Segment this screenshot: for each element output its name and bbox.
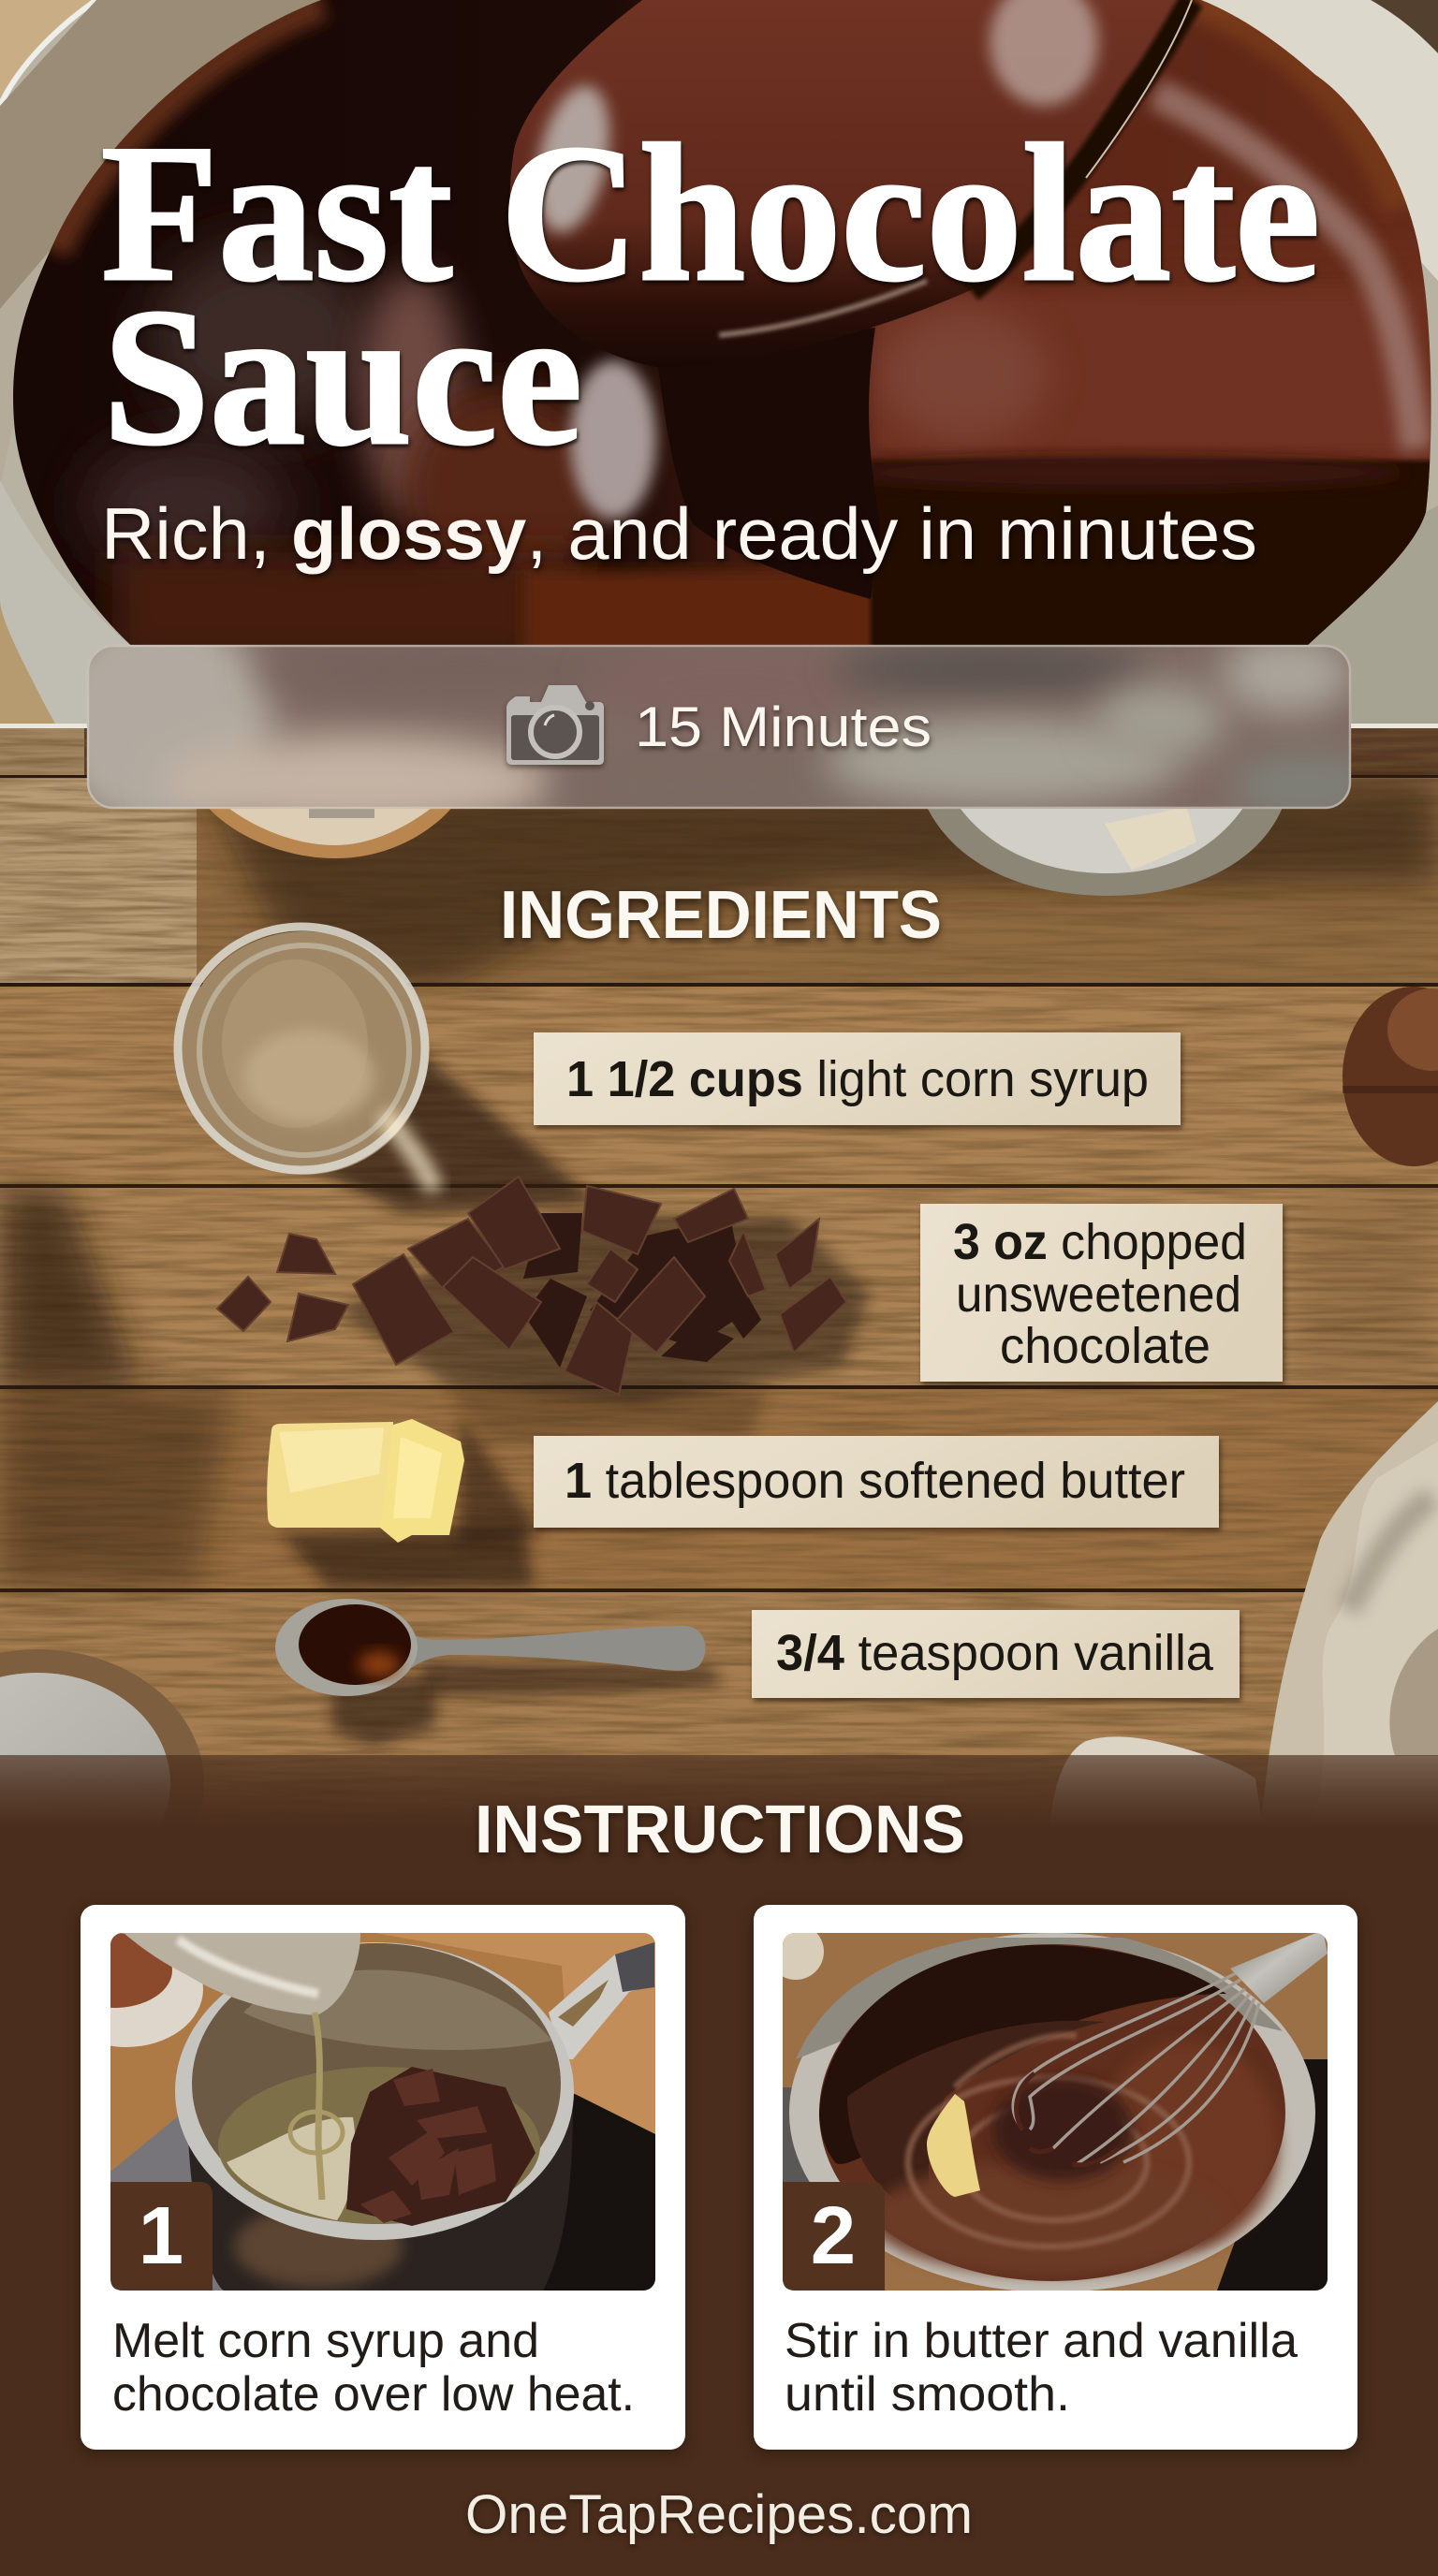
step 2 text: until smooth.	[785, 2367, 1070, 2422]
step 1 text: chocolate over low heat.	[112, 2367, 635, 2422]
ingredient label: corn syrup: 1 1/2 cups light corn syrup	[566, 1051, 1149, 1107]
ingredient label: chocolate	[920, 1204, 1283, 1382]
step 2 number badge	[783, 2182, 885, 2291]
ingredient label: butter	[534, 1436, 1219, 1528]
bowl of sugar at lower left	[0, 1649, 203, 1808]
ingredient label: corn syrup	[534, 1032, 1181, 1125]
subtitle: Rich, glossy, and ready in minutes	[101, 492, 1257, 575]
icon: spoon of vanilla	[275, 1599, 706, 1696]
wooden knob at right edge	[1343, 987, 1438, 1166]
step 2 photo	[768, 1924, 1328, 2292]
time text: 15 Minutes	[635, 695, 932, 758]
ingredient label: butter: 1 tablespoon softened butter	[565, 1453, 1185, 1509]
step 1 number badge: 1	[139, 2190, 183, 2281]
step card 2	[754, 1905, 1357, 2450]
title: Sauce	[103, 269, 582, 486]
instructions dark brown panel	[0, 1755, 1438, 2576]
title: Fast Chocolate	[101, 105, 1320, 322]
step 2 number badge: 2	[811, 2190, 856, 2281]
step 2 text	[785, 2314, 1298, 2422]
ingredient label: vanilla	[752, 1610, 1240, 1698]
icon: camera	[506, 685, 604, 765]
icon: glass of corn syrup	[178, 927, 435, 1191]
step 1 text: Melt corn syrup and	[112, 2314, 539, 2368]
ingredients heading: INGREDIENTS	[500, 878, 942, 953]
white hero divider line	[0, 724, 1438, 728]
wood table background	[0, 725, 1438, 1835]
icon: butter	[267, 1419, 464, 1543]
step card 1	[50, 1905, 685, 2450]
title	[101, 105, 1320, 486]
ingredient label: chocolate: unsweetened	[956, 1266, 1241, 1323]
hero photo: bowl of chocolate sauce and spoon	[0, 0, 1438, 725]
plate at top left	[206, 805, 454, 858]
ingredient label: vanilla: 3/4 teaspoon vanilla	[776, 1625, 1214, 1681]
ingredient label: chocolate: chocolate	[1000, 1318, 1211, 1374]
step 1 number badge	[110, 2182, 213, 2291]
step 1 text	[112, 2314, 635, 2422]
footer website: OneTapRecipes.com	[465, 2484, 973, 2545]
instructions heading: INSTRUCTIONS	[475, 1793, 965, 1867]
bowl with flour at top right	[926, 805, 1284, 896]
linen towel	[1049, 1401, 1438, 1835]
ingredient label: chocolate: 3 oz chopped	[953, 1214, 1247, 1270]
step 2 text: Stir in butter and vanilla	[785, 2314, 1298, 2368]
icon: chopped chocolate pile	[217, 1177, 871, 1404]
step 1 photo	[110, 1933, 655, 2291]
time bar: frosted glass panel	[86, 644, 1352, 809]
